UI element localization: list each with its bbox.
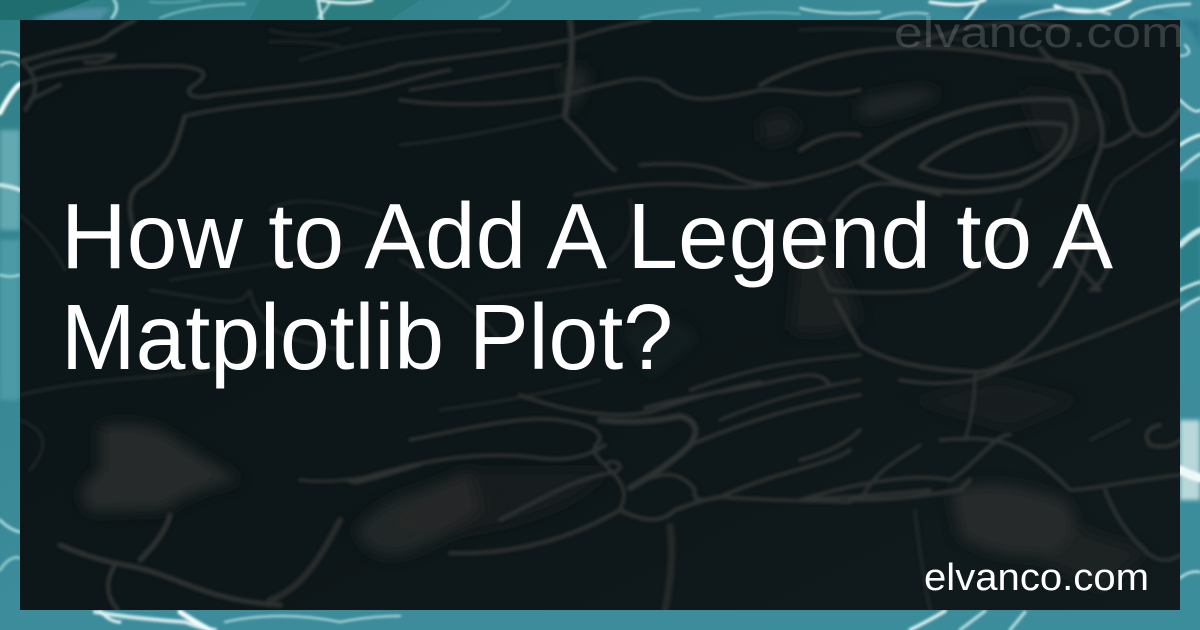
title — [61, 184, 1113, 389]
title line 2: Matplotlib Plot? — [61, 285, 673, 389]
title line 1: How to Add A Legend to A — [61, 184, 1113, 288]
soft caustic blobs — [82, 67, 1150, 590]
watermark top right: elvanco.com — [894, 9, 1184, 57]
site name bottom right: elvanco.com — [924, 557, 1149, 599]
